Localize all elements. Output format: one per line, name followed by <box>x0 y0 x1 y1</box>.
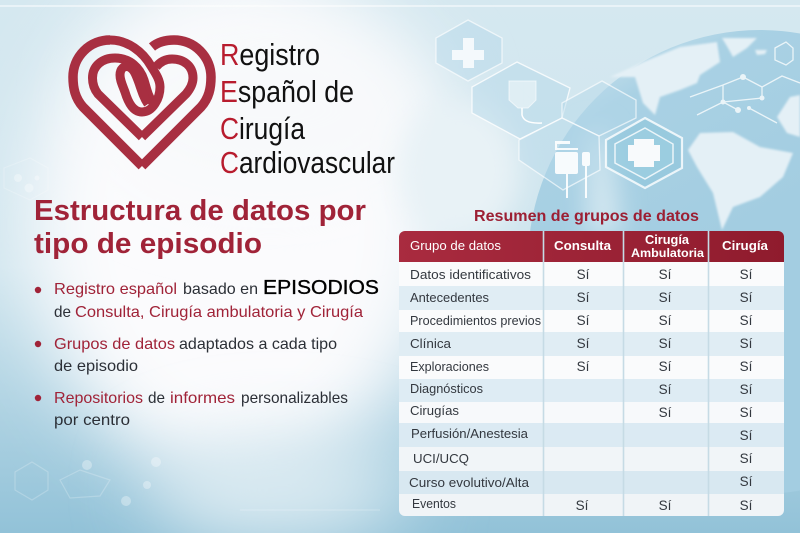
title <box>34 195 366 260</box>
column: Cirugía values: Sí <box>740 359 753 374</box>
column: Cirugía Ambulatoria values: Sí <box>659 313 672 328</box>
column: Cirugía Ambulatoria values: Sí <box>659 382 672 397</box>
column: Cirugía Ambulatoria values <box>659 267 672 513</box>
header labels: Ambulatoria <box>631 246 704 260</box>
row labels: Eventos <box>412 496 456 511</box>
column: Cirugía Ambulatoria values: Sí <box>659 405 672 420</box>
row labels: Clínica <box>410 336 452 351</box>
column: Cirugía Ambulatoria values: Sí <box>659 267 672 282</box>
text: registry name <box>220 38 395 180</box>
column: Cirugía values <box>740 267 753 513</box>
column: Consulta values: Sí <box>577 290 590 305</box>
header labels: Cirugía <box>645 232 690 247</box>
bullet: repositories: personalizables <box>241 390 348 407</box>
title: Estructura de datos por <box>34 195 366 227</box>
bullet: data groups: adaptados a cada tipo <box>179 336 337 353</box>
column: Consulta values: Sí <box>577 313 590 328</box>
text: registry name: Registro <box>220 38 320 72</box>
column: Cirugía values: Sí <box>740 290 753 305</box>
bullet: repositories <box>35 390 348 429</box>
row labels: Antecedentes <box>410 290 489 305</box>
column: Cirugía values: Sí <box>740 336 753 351</box>
bullet: data groups: de episodio <box>54 358 138 375</box>
bullet: episodes <box>35 277 379 321</box>
logo <box>73 38 395 180</box>
text: registry name: Cardiovascular <box>220 146 395 180</box>
column: Cirugía values: Sí <box>740 428 753 443</box>
header labels: Cirugía <box>722 238 769 253</box>
bullet: episodes: basado en <box>183 281 258 298</box>
column: Cirugía values: Sí <box>740 498 753 513</box>
row labels: Perfusión/Anestesia <box>411 426 529 441</box>
bullet: data groups: Grupos de datos <box>54 336 175 353</box>
column: Cirugía values: Sí <box>740 451 753 466</box>
bullet: repositories: de <box>148 390 165 407</box>
row labels: Procedimientos previos <box>410 313 541 328</box>
column: Consulta values: Sí <box>577 336 590 351</box>
column: Cirugía values: Sí <box>740 267 753 282</box>
column: Cirugía Ambulatoria values: Sí <box>659 498 672 513</box>
column: Cirugía Ambulatoria values: Sí <box>659 290 672 305</box>
table header <box>399 231 784 262</box>
data table <box>399 231 784 516</box>
bullet list <box>35 277 379 429</box>
row labels: Datos identificativos <box>410 267 532 282</box>
row labels: Cirugías <box>410 403 459 418</box>
text: registry name: Español de <box>220 75 354 109</box>
table heading: Resumen de grupos de datos <box>474 208 699 225</box>
bullet: data groups <box>35 336 337 375</box>
table rows <box>399 262 784 516</box>
header labels <box>410 232 769 260</box>
column: Cirugía values: Sí <box>740 405 753 420</box>
bullet: episodes: EPISODIOS <box>263 277 379 299</box>
bullet: repositories: informes <box>170 390 235 407</box>
column: Consulta values: Sí <box>577 359 590 374</box>
title: tipo de episodio <box>34 228 262 260</box>
column: Consulta values: Sí <box>576 498 589 513</box>
column: Cirugía values: Sí <box>740 313 753 328</box>
header labels: Consulta <box>554 238 612 253</box>
row labels: Exploraciones <box>410 359 489 374</box>
row labels: Diagnósticos <box>410 381 483 396</box>
medical hexagons <box>436 20 682 190</box>
globe <box>528 30 800 494</box>
column: Cirugía Ambulatoria values: Sí <box>659 336 672 351</box>
icon: heart <box>73 40 211 166</box>
bullet: episodes: de <box>54 304 71 321</box>
column: Cirugía values: Sí <box>740 474 753 489</box>
row labels: UCI/UCQ <box>413 451 469 466</box>
bullet: repositories: por centro <box>54 412 130 429</box>
icon: medical cross <box>452 38 484 68</box>
bullet: repositories: Repositorios <box>54 390 143 407</box>
row labels <box>409 267 541 511</box>
bullet: episodes: Registro español <box>54 281 177 298</box>
text: registry name: Cirugía <box>220 112 305 146</box>
icon: container <box>555 141 590 198</box>
column: Cirugía Ambulatoria values: Sí <box>659 359 672 374</box>
row labels: Curso evolutivo/Alta <box>409 475 530 490</box>
icon: hospital cross <box>628 139 660 167</box>
bullet: episodes: Consulta, Cirugía ambulatoria y Cirugía <box>75 304 363 321</box>
icon: drip bag <box>509 81 542 123</box>
column: Cirugía values: Sí <box>740 382 753 397</box>
column: Consulta values: Sí <box>577 267 590 282</box>
column: Consulta values <box>576 267 590 513</box>
header labels: Grupo de datos <box>410 238 501 253</box>
